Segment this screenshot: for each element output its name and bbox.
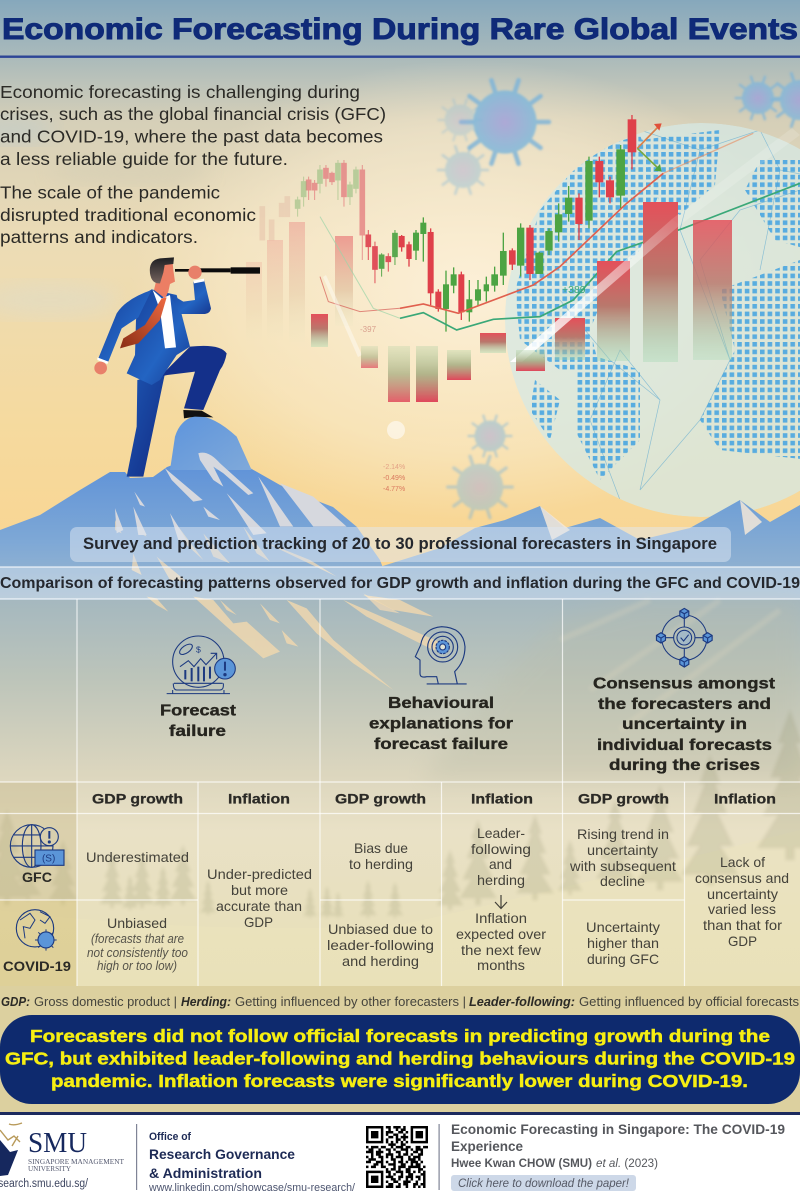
column: consensus and uncertainty cells: than that for bbox=[703, 917, 782, 933]
column: behavioural explanation cells: to herding bbox=[349, 856, 413, 872]
icon: crystal ball forecast failure bbox=[167, 636, 235, 694]
row label: COVID-19 with globe and virus icon: COVID-19 bbox=[3, 958, 71, 974]
comparison table grid bbox=[0, 599, 800, 986]
comparison heading band: Comparison of forecasting patterns observed for GDP growth and inflation during the GFC and COVID-19 bbox=[0, 575, 800, 592]
office of research governance bbox=[136, 1124, 356, 1194]
column: consensus and uncertainty cells: varied less bbox=[708, 901, 776, 917]
icon: crystal ball forecast failure: $ bbox=[196, 645, 201, 655]
column: consensus and uncertainty cells: decline bbox=[600, 873, 645, 889]
globe bbox=[505, 123, 800, 517]
intro text: a less reliable guide for the future. bbox=[0, 149, 288, 169]
column: forecast failure cells: GDP bbox=[244, 914, 273, 930]
sub-headers: GDP growth and inflation: Inflation bbox=[714, 792, 776, 806]
column: behavioural explanation cells: Unbiased due to bbox=[328, 921, 433, 937]
paper citation: et al. (2023) bbox=[596, 1158, 658, 1170]
column: behavioural explanation cells: the next few bbox=[461, 942, 542, 958]
faded trend lines left of the chart bbox=[320, 217, 400, 318]
office of research governance: Research Governance bbox=[149, 1146, 295, 1162]
column: forecast failure cells: (forecasts that are bbox=[91, 932, 184, 946]
heading: consensus and uncertainty: Consensus amongst bbox=[593, 676, 775, 692]
column: consensus and uncertainty cells: Lack of bbox=[720, 854, 765, 870]
sub-headers: GDP growth and inflation: GDP growth bbox=[578, 792, 669, 806]
arrow: herding leads to inflation bbox=[495, 895, 507, 908]
large bars over globe: -397 bbox=[360, 325, 377, 334]
intro text: and COVID-19, where the past data becomes bbox=[0, 126, 383, 146]
heading: behavioural explanations bbox=[369, 695, 513, 753]
column: behavioural explanation cells: months bbox=[477, 957, 525, 973]
heading: forecast failure: Forecast bbox=[160, 702, 236, 720]
column: forecast failure cells: Unbiased bbox=[107, 915, 167, 931]
SMU logo: UNIVERSITY bbox=[28, 1165, 71, 1173]
heading: forecast failure: failure bbox=[169, 723, 226, 740]
rock under the foot bbox=[170, 416, 252, 470]
column: consensus and uncertainty cells: with subsequent bbox=[569, 858, 676, 874]
intro text: Economic forecasting is challenging during bbox=[0, 82, 360, 102]
key takeaway pill: GFC, but exhibited leader-following and herding behaviours during the COVID-19 bbox=[5, 1048, 795, 1068]
column: forecast failure cells: not consistently too bbox=[87, 946, 188, 960]
virus particles bbox=[438, 73, 800, 518]
column: forecast failure cells: accurate than bbox=[216, 898, 302, 914]
column: consensus and uncertainty cells bbox=[569, 826, 789, 967]
sky background bbox=[0, 0, 800, 600]
glossary band: Leader-following: bbox=[469, 995, 575, 1009]
heading: behavioural explanations: explanations for bbox=[369, 716, 513, 732]
sub-headers: GDP growth and inflation: GDP growth bbox=[335, 792, 426, 806]
column: behavioural explanation cells: following bbox=[471, 841, 531, 857]
glossary band: Getting influenced by official forecasts bbox=[579, 995, 799, 1009]
row label: GFC with globe icon: (S) bbox=[42, 853, 55, 864]
column: behavioural explanation cells: herding bbox=[477, 872, 525, 888]
footer background bbox=[0, 1112, 800, 1200]
glossary band: Gross domestic product | bbox=[34, 995, 177, 1009]
column: behavioural explanation cells: and bbox=[489, 856, 512, 872]
faded bars and candlesticks behind the chart bbox=[246, 160, 397, 347]
snow on mountain bbox=[115, 453, 347, 540]
column: consensus and uncertainty cells: Rising trend in bbox=[577, 826, 669, 842]
column: consensus and uncertainty cells: Uncertainty bbox=[586, 919, 660, 935]
intro text: patterns and indicators. bbox=[0, 227, 198, 247]
paper citation bbox=[438, 1121, 785, 1190]
heading: consensus and uncertainty: during the crises bbox=[609, 757, 760, 774]
survey caption box bbox=[70, 527, 731, 562]
column: behavioural explanation cells: Leader- bbox=[477, 825, 525, 841]
title: Economic Forecasting During Rare Global Events bbox=[2, 13, 798, 46]
main candlestick chart bbox=[320, 115, 800, 332]
SMU logo bbox=[0, 1123, 124, 1190]
negative bars: -2.14% bbox=[383, 464, 405, 471]
survey caption box: Survey and prediction tracking of 20 to 30 professional forecasters in Singapore bbox=[83, 535, 717, 553]
sub-headers: GDP growth and inflation: Inflation bbox=[228, 792, 290, 806]
key takeaway pill bbox=[0, 1015, 800, 1104]
heading: consensus and uncertainty: individual forecasts bbox=[597, 737, 772, 754]
SMU logo: SINGAPORE MANAGEMENT bbox=[28, 1157, 124, 1166]
column: behavioural explanation cells: expected over bbox=[456, 926, 546, 942]
glossary band: GDP: bbox=[1, 995, 30, 1009]
intro text bbox=[0, 82, 386, 247]
heading: consensus and uncertainty: the forecasters and bbox=[598, 696, 771, 713]
intro text: disrupted traditional economic bbox=[0, 205, 256, 225]
column: consensus and uncertainty cells: during GFC bbox=[587, 951, 659, 967]
column: consensus and uncertainty cells: consensus and bbox=[695, 870, 789, 886]
glossary band: Herding: bbox=[181, 995, 231, 1009]
key takeaway pill: pandemic. Inflation forecasts were significantly lower during COVID-19. bbox=[51, 1071, 748, 1091]
comparison heading band bbox=[0, 567, 800, 599]
row label: COVID-19 with globe and virus icon bbox=[3, 910, 71, 974]
heading: behavioural explanations: forecast failure bbox=[374, 736, 508, 753]
person with telescope on the peak bbox=[94, 257, 347, 540]
heading: consensus and uncertainty: uncertainty in bbox=[622, 716, 747, 733]
paper citation: Economic Forecasting in Singapore: The COVID-19 bbox=[451, 1121, 785, 1137]
column: consensus and uncertainty cells: uncertainty bbox=[587, 842, 658, 858]
column: forecast failure cells: high or too low) bbox=[97, 959, 177, 973]
column: consensus and uncertainty cells: uncertainty bbox=[707, 886, 778, 902]
sub-headers: GDP growth and inflation: Inflation bbox=[471, 792, 533, 806]
paper citation: Hwee Kwan CHOW (SMU) bbox=[451, 1158, 592, 1170]
column: forecast failure cells: Under-predicted bbox=[207, 866, 312, 882]
column: forecast failure cells bbox=[86, 849, 312, 973]
column: behavioural explanation cells: Bias due bbox=[354, 840, 408, 856]
download button: Click here to download the paper! bbox=[458, 1176, 630, 1190]
QR code bbox=[366, 1127, 428, 1187]
office of research governance: www.linkedin.com/showcase/smu-research/ bbox=[148, 1182, 356, 1194]
glossary band bbox=[0, 986, 800, 1112]
row label: GFC with globe icon bbox=[10, 825, 64, 885]
right mountains bbox=[370, 500, 800, 620]
key takeaway pill: Forecasters did not follow official forecasts in predicting growth during the bbox=[30, 1026, 770, 1046]
column: forecast failure cells: but more bbox=[231, 882, 288, 898]
intro text: crises, such as the global financial crisis (GFC) bbox=[0, 104, 386, 124]
large bars over globe bbox=[323, 128, 800, 362]
cream ridge streaks bbox=[147, 595, 450, 690]
column: consensus and uncertainty cells: higher than bbox=[587, 935, 659, 951]
paper citation: Experience bbox=[451, 1138, 523, 1154]
office of research governance: & Administration bbox=[149, 1165, 262, 1181]
large bars over globe: +389 bbox=[562, 284, 586, 296]
row label: GFC with globe icon: GFC bbox=[22, 869, 52, 885]
column: behavioural explanation cells: leader-following bbox=[327, 937, 434, 953]
office of research governance: Office of bbox=[149, 1131, 191, 1143]
heading: consensus and uncertainty bbox=[593, 676, 775, 774]
intro text: The scale of the pandemic bbox=[0, 182, 220, 202]
column: behavioural explanation cells bbox=[327, 825, 546, 973]
negative bars bbox=[361, 333, 545, 493]
heading: behavioural explanations: Behavioural bbox=[388, 695, 494, 712]
glossary band: Getting influenced by other forecasters | bbox=[235, 995, 466, 1009]
negative bars: -0.49% bbox=[383, 475, 405, 482]
column: consensus and uncertainty cells: GDP bbox=[728, 933, 757, 949]
lower background with faint mountains and trees bbox=[0, 600, 800, 986]
column: behavioural explanation cells: Inflation bbox=[475, 910, 527, 926]
sub-headers: GDP growth and inflation bbox=[92, 792, 776, 806]
icon: head with gear bbox=[415, 627, 467, 684]
SMU logo: SMU bbox=[28, 1128, 87, 1159]
heading: forecast failure bbox=[160, 702, 236, 740]
sub-headers: GDP growth and inflation: GDP growth bbox=[92, 792, 183, 806]
foreground mountain bbox=[0, 455, 400, 613]
row label column shading bbox=[0, 782, 77, 986]
column: behavioural explanation cells: and herding bbox=[342, 953, 419, 969]
column: forecast failure cells: Underestimated bbox=[86, 849, 189, 865]
negative bars: -4.77% bbox=[383, 486, 405, 493]
icon: consensus network bbox=[656, 608, 712, 667]
